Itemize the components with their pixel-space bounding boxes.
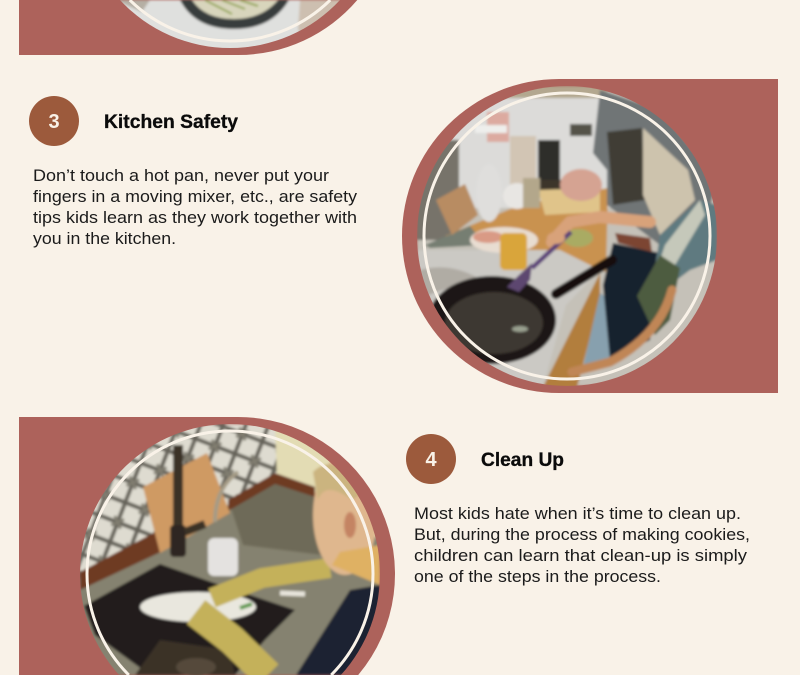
text block: Clean Up description: children can learn that clean-up is simply — [414, 546, 748, 565]
text block: Kitchen Safety description — [33, 166, 358, 248]
badge: number 3: 3 — [48, 111, 60, 133]
text block: Clean Up description: Most kids hate when it’s time to clean up. — [414, 504, 741, 523]
panel: step 4 Clean Up text — [406, 434, 750, 586]
step 4 terracotta backing — [19, 417, 395, 675]
panel: step 3 Kitchen Safety text — [29, 96, 358, 248]
step 2 terracotta backing — [19, 0, 357, 55]
panel: step 4 photo — [19, 417, 395, 675]
heading: Clean Up: Clean Up — [481, 449, 564, 471]
badge: number 3 — [29, 96, 79, 146]
step 3 photo: pan and brush at the counter — [417, 86, 717, 387]
text block: Clean Up description: one of the steps in the process. — [414, 567, 661, 586]
badge: number 4 — [406, 434, 456, 484]
step 4 white ring — [87, 431, 373, 675]
text block: Clean Up description — [414, 504, 750, 586]
text block: Kitchen Safety description: Don’t touch a hot pan, never put your — [33, 166, 329, 185]
badge: number 4: 4 — [425, 449, 437, 471]
step 2 photo: bowl on table — [120, 0, 340, 48]
panel: step 3 photo — [402, 79, 778, 393]
step 3 terracotta backing — [402, 79, 778, 393]
step 4 photo: child washing dishes — [79, 424, 380, 675]
text block: Kitchen Safety description: fingers in a moving mixer, etc., are safety — [33, 187, 358, 206]
text block: Kitchen Safety description: you in the kitchen. — [33, 229, 176, 248]
text block: Kitchen Safety description: tips kids learn as they work together with — [33, 208, 357, 227]
text block: Clean Up description: But, during the process of making cookies, — [414, 525, 750, 544]
heading: Kitchen Safety: Kitchen Safety — [104, 111, 238, 133]
step 2 white ring — [130, 0, 330, 41]
step 3 white ring — [424, 93, 710, 379]
panel: step 2 photo (cropped at top) — [19, 0, 357, 55]
